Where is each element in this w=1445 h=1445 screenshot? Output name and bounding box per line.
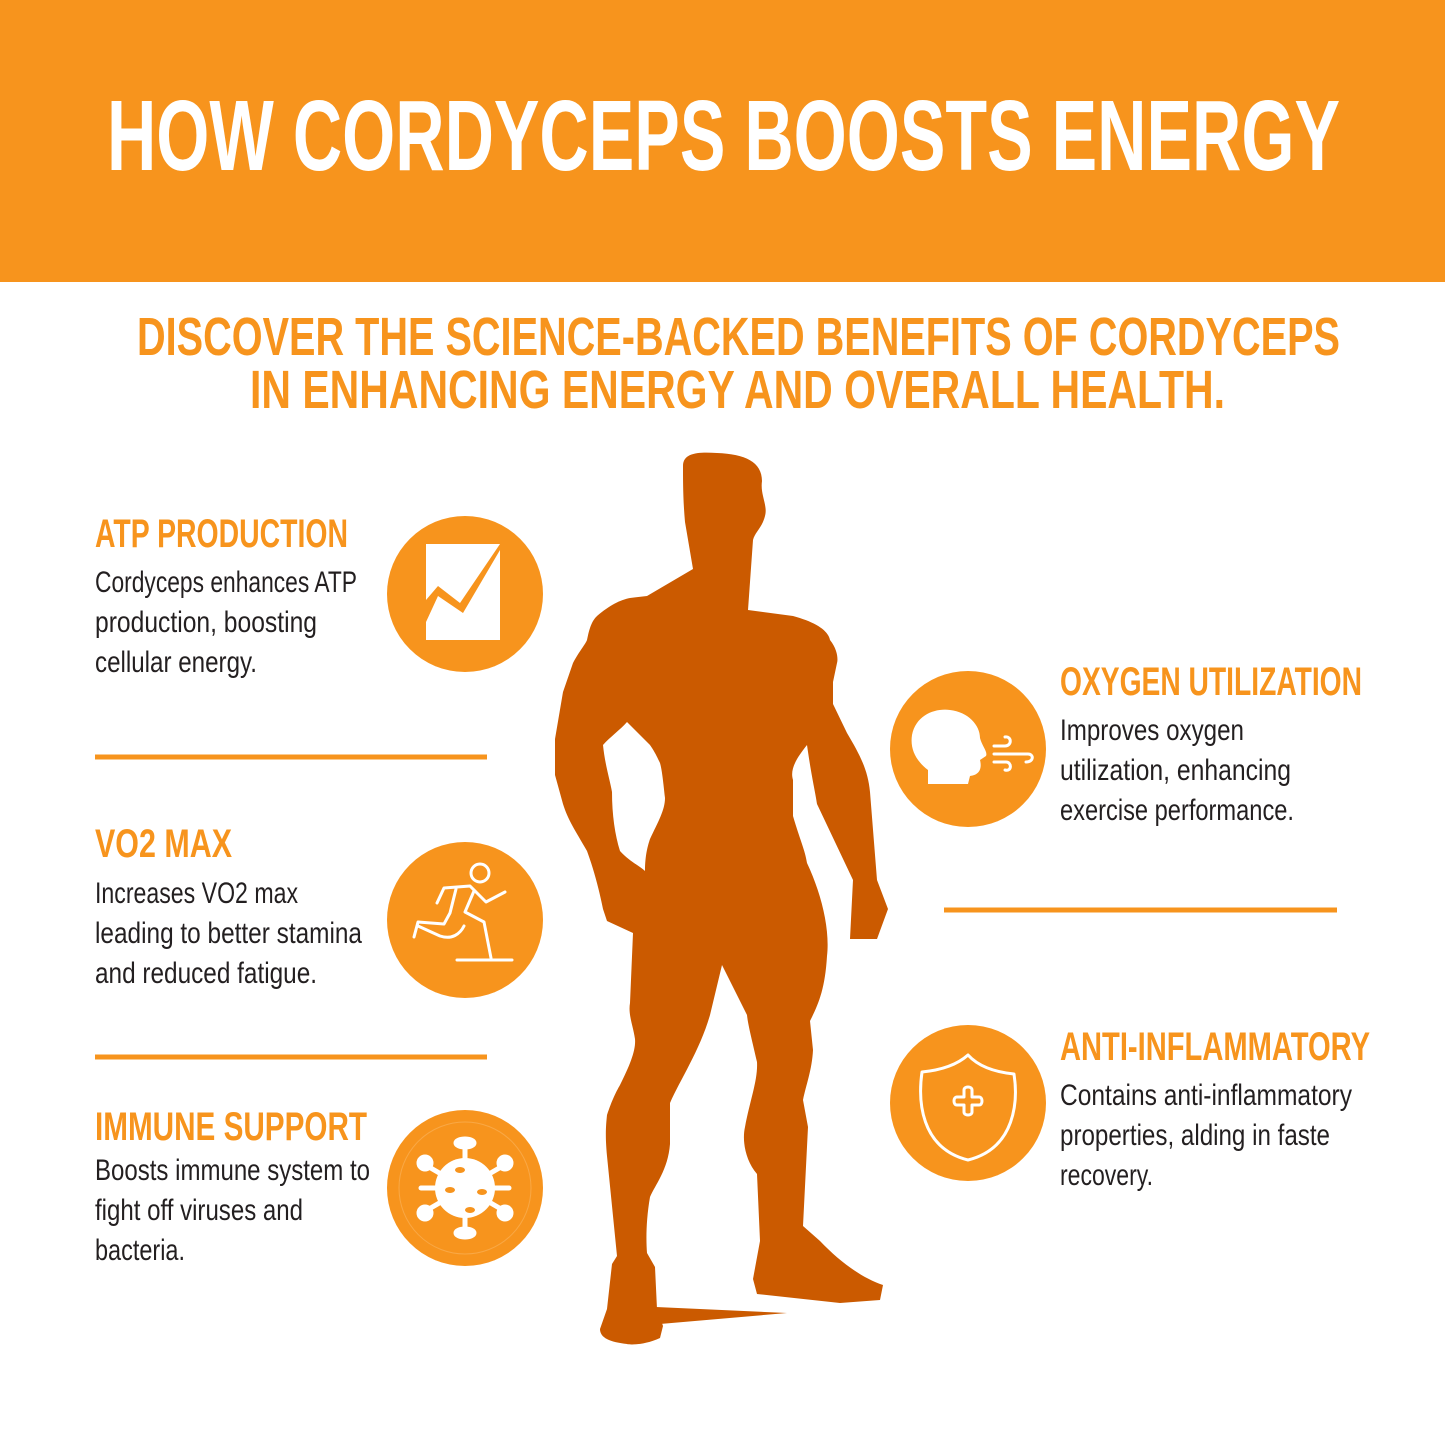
- panel: immune support: [95, 1105, 543, 1267]
- icon: runner: [387, 842, 543, 998]
- title banner: [0, 0, 1445, 282]
- text block: immune: fight off viruses and: [95, 1194, 303, 1227]
- text block: oxygen: Improves oxygen: [1060, 714, 1244, 747]
- text block: VO2: and reduced fatigue.: [95, 957, 317, 990]
- silhouette: man: [555, 453, 888, 1344]
- text block: anti-inflammatory: recovery.: [1060, 1159, 1153, 1192]
- text block: ATP: [95, 566, 357, 679]
- icon: breathing head: [890, 671, 1046, 827]
- text block: immune: bacteria.: [95, 1234, 185, 1267]
- text block: immune: [95, 1154, 370, 1267]
- subtitle: [137, 307, 1340, 420]
- panel: VO2 max: [95, 822, 543, 998]
- heading: ATP production: ATP PRODUCTION: [95, 512, 348, 556]
- icon: shield: [890, 1025, 1046, 1181]
- panel: anti-inflammatory: [890, 1025, 1370, 1192]
- text block: anti-inflammatory: Contains anti-inflammatory: [1060, 1079, 1352, 1112]
- panel: ATP production: [95, 512, 543, 679]
- text block: oxygen: exercise performance.: [1060, 794, 1294, 827]
- shadow: [656, 1307, 787, 1324]
- icon: virus: [387, 1110, 543, 1266]
- text block: ATP: production, boosting: [95, 606, 317, 639]
- text block: ATP: Cordyceps enhances ATP: [95, 566, 357, 599]
- heading: VO2 max: VO2 MAX: [95, 822, 232, 866]
- icon: chart: [387, 516, 543, 672]
- text block: VO2: leading to better stamina: [95, 917, 362, 950]
- text block: anti-inflammatory: properties, alding in faste: [1060, 1119, 1330, 1152]
- text block: immune: Boosts immune system to: [95, 1154, 370, 1187]
- text block: VO2: Increases VO2 max: [95, 877, 298, 910]
- panel: oxygen utilization: [890, 660, 1362, 827]
- text block: VO2: [95, 877, 362, 990]
- heading: immune support: IMMUNE SUPPORT: [95, 1105, 367, 1149]
- text block: anti-inflammatory: [1060, 1079, 1352, 1192]
- text block: ATP: cellular energy.: [95, 646, 257, 679]
- text block: oxygen: utilization, enhancing: [1060, 754, 1291, 787]
- text block: oxygen: [1060, 714, 1294, 827]
